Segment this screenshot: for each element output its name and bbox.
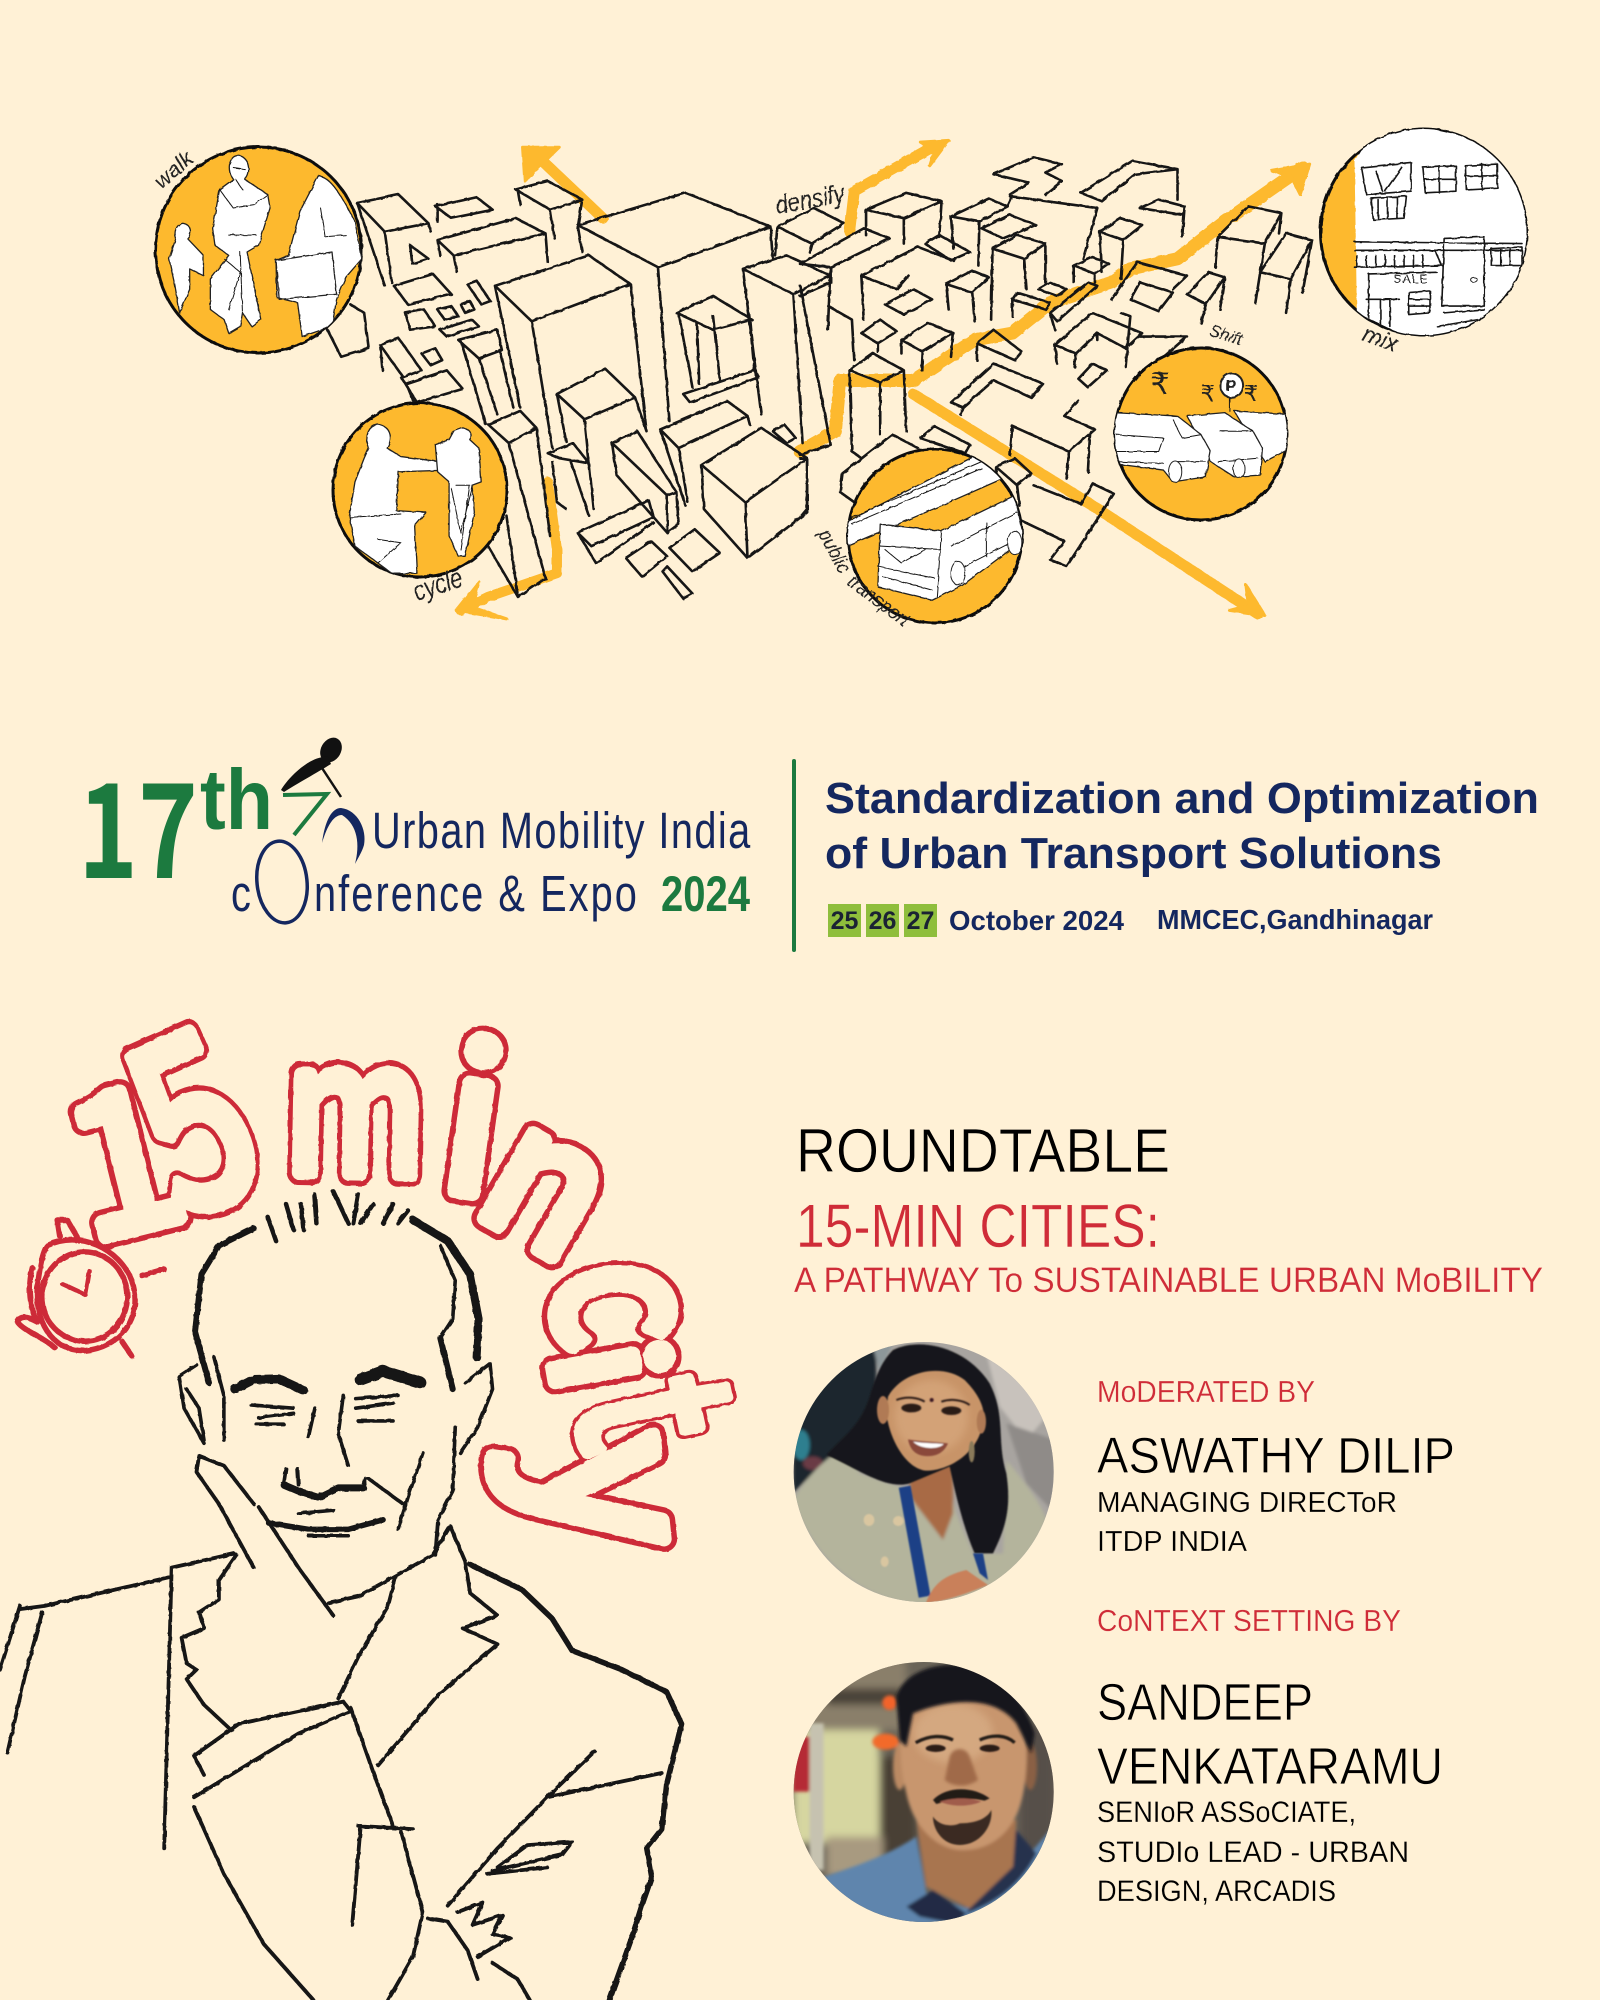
15 min city hand lettering: m xyxy=(283,963,428,1226)
moderator name: ASWATHY DILIP xyxy=(1097,1427,1455,1484)
15 min city hand lettering: 5 xyxy=(70,929,301,1281)
conference logo xyxy=(78,726,751,925)
15 min city hand lettering: i xyxy=(428,959,523,1254)
topic title: 15-MIN CITIES: xyxy=(796,1192,1160,1260)
hand labels: walk xyxy=(149,145,199,194)
15 min city hand lettering: i xyxy=(428,959,523,1254)
hand labels: densify xyxy=(773,178,849,220)
15 min city hand lettering: m xyxy=(283,963,428,1226)
speaker role line three: DESIGN, ARCADIS xyxy=(1097,1875,1336,1908)
face lines xyxy=(179,1246,493,1536)
hand labels: cycle xyxy=(409,562,466,607)
shop sign: SALE xyxy=(1394,272,1428,286)
buildings left block xyxy=(327,181,844,599)
date boxes: 26 xyxy=(869,907,896,935)
15 min city hand lettering: t xyxy=(512,1345,831,1471)
theme line two: of Urban Transport Solutions xyxy=(825,829,1442,878)
speaker role: SENIoR ASSoCIATE, xyxy=(1097,1796,1356,1829)
logo number: 17 xyxy=(78,726,198,916)
hand labels xyxy=(149,145,1403,632)
logo year: 2024 xyxy=(661,866,750,922)
buildings right block xyxy=(800,157,1312,566)
moderator label: MoDERATED BY xyxy=(1097,1374,1315,1409)
15 min city hand lettering: i xyxy=(507,1325,728,1403)
logo c: c xyxy=(231,865,251,922)
date boxes xyxy=(828,904,937,937)
hand labels: Shift xyxy=(1207,321,1246,350)
speaker role line two: STUDIo LEAD - URBAN xyxy=(1097,1836,1409,1869)
thick hair and brows xyxy=(195,1220,479,1497)
icon: alarm clock xyxy=(17,1220,164,1356)
15 min city hand lettering: n xyxy=(444,1029,670,1310)
15 min city hand lettering: i xyxy=(507,1325,728,1403)
man line drawing with clock xyxy=(0,1191,682,2000)
speaker name line two: VENKATARAMU xyxy=(1097,1738,1443,1796)
divider xyxy=(792,759,796,952)
moderator organisation: ITDP INDIA xyxy=(1097,1526,1248,1558)
conference theme xyxy=(825,774,1539,937)
moderator role: MANAGING DIRECToR xyxy=(1097,1487,1397,1519)
15 min city hand lettering: 5 xyxy=(70,929,301,1281)
circle: cycle xyxy=(333,403,507,577)
logo suffix: th xyxy=(200,753,273,848)
icon: cyclist microphone xyxy=(253,734,365,925)
circle: shift xyxy=(1111,348,1291,520)
orange arrows xyxy=(456,140,1310,619)
15 min city hand lettering: c xyxy=(492,1238,796,1362)
right shoulder xyxy=(470,1564,682,2000)
hand and jacket lines xyxy=(0,1456,662,2000)
parking and rupee glyphs: P xyxy=(1226,378,1237,395)
logo line one: Urban Mobility India xyxy=(372,802,751,859)
circle: public transport xyxy=(842,449,1024,623)
15 min city hand lettering: y xyxy=(477,1418,794,1560)
15 min city hand lettering: n xyxy=(444,1029,670,1310)
date boxes: 25 xyxy=(831,907,858,935)
circle: walk xyxy=(156,147,362,353)
roundtable heading: ROUNDTABLE xyxy=(796,1117,1170,1186)
date: October 2024 xyxy=(949,905,1124,936)
photo: Sandeep Venkataramu xyxy=(793,1660,1055,1924)
15 min city hand lettering: 1 xyxy=(36,1000,206,1295)
venue: MMCEC,Gandhinagar xyxy=(1157,904,1433,935)
parking and rupee glyphs: ₹ xyxy=(1150,368,1170,401)
hand labels: public xyxy=(813,525,855,577)
15 min city hand lettering: t xyxy=(512,1345,831,1471)
city illustration xyxy=(149,127,1536,632)
context label: CoNTEXT SETTING BY xyxy=(1097,1603,1401,1638)
date boxes: 27 xyxy=(907,907,934,935)
speaker name line one: SANDEEP xyxy=(1097,1674,1313,1732)
logo line two: nference & Expo xyxy=(314,865,637,922)
photo: Aswathy Dilip xyxy=(793,1340,1055,1607)
hair tufts xyxy=(268,1191,408,1241)
15 min city hand lettering: c xyxy=(492,1238,796,1362)
topic subtitle: A PATHWAY To SUSTAINABLE URBAN MoBILITY xyxy=(794,1261,1543,1300)
15 min city hand lettering: 1 xyxy=(36,1000,206,1295)
parking and rupee glyphs: ₹ xyxy=(1201,381,1215,406)
theme line one: Standardization and Optimization xyxy=(825,774,1539,823)
parking and rupee glyphs: ₹ xyxy=(1244,381,1258,406)
hand labels: transport xyxy=(843,570,915,632)
circle: mix xyxy=(1320,127,1536,340)
parking and rupee glyphs xyxy=(1150,368,1258,406)
15 min city hand lettering: y xyxy=(477,1418,794,1560)
hand labels: mix xyxy=(1359,320,1403,357)
15 min city hand lettering xyxy=(36,929,831,1560)
